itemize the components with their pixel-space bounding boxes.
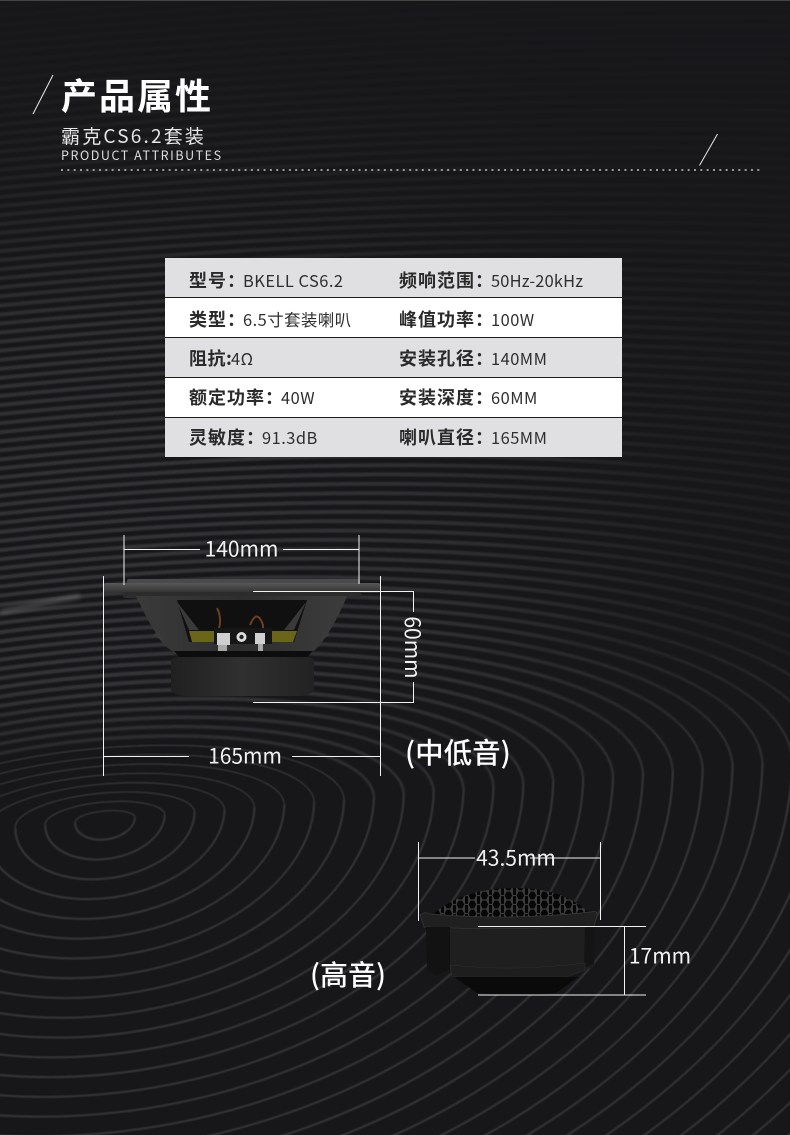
subtitle: 霸克CS6.2套装 <box>61 122 206 149</box>
title: 产品属性 <box>61 68 213 120</box>
row: impedance / mounting hole: 阻抗: <box>189 345 232 371</box>
dimension: 60mm: 60mm <box>398 616 428 679</box>
dimension: 165mm: 165mm <box>208 740 282 770</box>
row: rated power / mounting depth: 安装深度： <box>399 384 494 410</box>
row: model / frequency range: 型号： <box>189 267 246 293</box>
specification table <box>165 258 622 457</box>
row: impedance / mounting hole: 安装孔径： <box>399 345 494 371</box>
row: type / peak power: 峰值功率： <box>399 306 494 332</box>
row: impedance / mounting hole <box>165 338 622 377</box>
dimension: 140mm: 140mm <box>205 534 278 564</box>
row: rated power / mounting depth: 60MM <box>491 385 538 409</box>
dimension: 43.5mm: 43.5mm <box>476 842 556 872</box>
row: rated power / mounting depth: 额定功率： <box>189 384 284 410</box>
dotted divider with slash <box>61 134 760 171</box>
dimension: 165mm <box>104 576 380 776</box>
english subtitle: PRODUCT ATTRIBUTES <box>61 145 223 164</box>
row: rated power / mounting depth <box>165 378 622 417</box>
speaker: tweeter <box>420 888 597 995</box>
speaker: woofer <box>103 579 381 696</box>
dimension: 17mm <box>478 926 691 995</box>
label: mid-bass: (中低音) <box>405 731 511 772</box>
row: impedance / mounting hole: 140MM <box>491 346 547 370</box>
row: impedance / mounting hole: 4Ω <box>231 346 254 370</box>
header slash left <box>32 74 54 114</box>
row: model / frequency range: 频响范围： <box>399 267 494 293</box>
row: type / peak power: 100W <box>491 307 535 331</box>
dimension: 60mm <box>253 592 428 702</box>
row: type / peak power <box>165 298 622 337</box>
row: sensitivity / diameter: 灵敏度： <box>189 424 265 450</box>
row: type / peak power: 6.5寸套装喇叭 <box>243 307 352 331</box>
row: sensitivity / diameter: 91.3dB <box>262 425 318 449</box>
row: sensitivity / diameter <box>165 418 622 457</box>
row: model / frequency range <box>165 258 622 297</box>
row: sensitivity / diameter: 165MM <box>491 425 547 449</box>
row: sensitivity / diameter: 喇叭直径： <box>399 424 494 450</box>
row: rated power / mounting depth: 40W <box>281 385 315 409</box>
dimension: 140mm <box>124 534 359 585</box>
dimension: 17mm: 17mm <box>629 940 691 970</box>
row: type / peak power: 类型： <box>189 306 246 332</box>
label: tweeter: (高音) <box>310 954 386 994</box>
dimension: 43.5mm <box>418 842 600 921</box>
row: model / frequency range: 50Hz-20kHz <box>491 268 583 292</box>
row: model / frequency range: BKELL CS6.2 <box>243 268 344 292</box>
